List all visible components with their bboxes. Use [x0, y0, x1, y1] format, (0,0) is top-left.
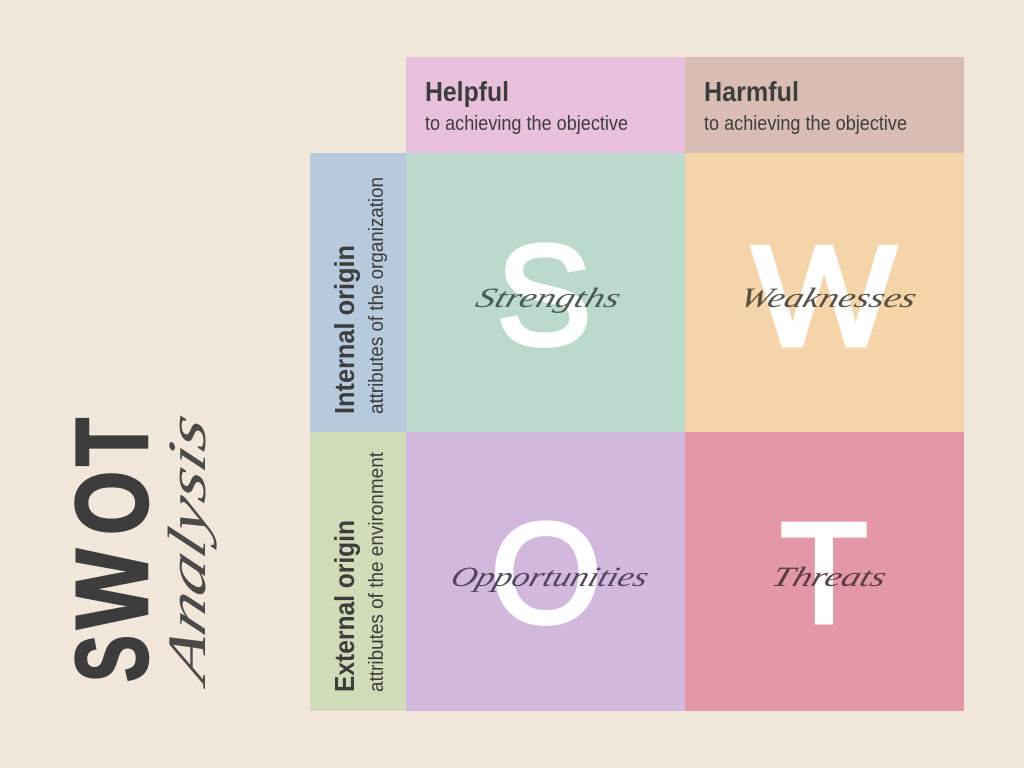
column header: Helpful: to achieving the objective: [425, 113, 628, 135]
column header: Harmful: to achieving the objective: [704, 113, 907, 135]
quadrant: Weaknesses: Weaknesses: [736, 283, 921, 314]
row header: Internal origin: attributes of the organization: [366, 177, 388, 414]
quadrant: Opportunities: O: [491, 494, 601, 653]
row header: External origin: [310, 432, 406, 711]
quadrant: Strengths: [406, 153, 685, 432]
title word: SWOT: T: [56, 418, 169, 466]
row header: Internal origin: Internal origin: [329, 245, 360, 414]
quadrant: Opportunities: Opportunities: [447, 562, 653, 593]
quadrant: Weaknesses: [685, 153, 964, 432]
row header: External origin: attributes of the environment: [366, 452, 388, 692]
column header: Helpful: [406, 57, 685, 153]
title word: SWOT: [55, 418, 169, 682]
quadrant: Opportunities: [406, 432, 685, 711]
title word: SWOT: W: [55, 549, 169, 629]
column header: Helpful: Helpful: [425, 76, 509, 107]
column header: Harmful: [685, 57, 964, 153]
quadrant: Threats: Threats: [768, 562, 891, 593]
title word: SWOT: O: [55, 471, 169, 535]
title word: SWOT: S: [55, 635, 169, 682]
column header: Harmful: Harmful: [704, 76, 799, 107]
quadrant: Strengths: S: [497, 216, 591, 375]
quadrant: Weaknesses: W: [752, 218, 896, 376]
row header: Internal origin: [310, 153, 406, 432]
quadrant: Threats: [685, 432, 964, 711]
quadrant: Strengths: Strengths: [472, 283, 625, 314]
title script: Analysis: Analysis: [158, 404, 217, 696]
row header: External origin: External origin: [329, 520, 360, 692]
quadrant: Threats: T: [781, 494, 867, 653]
title: SWOT Analysis: [55, 404, 217, 696]
